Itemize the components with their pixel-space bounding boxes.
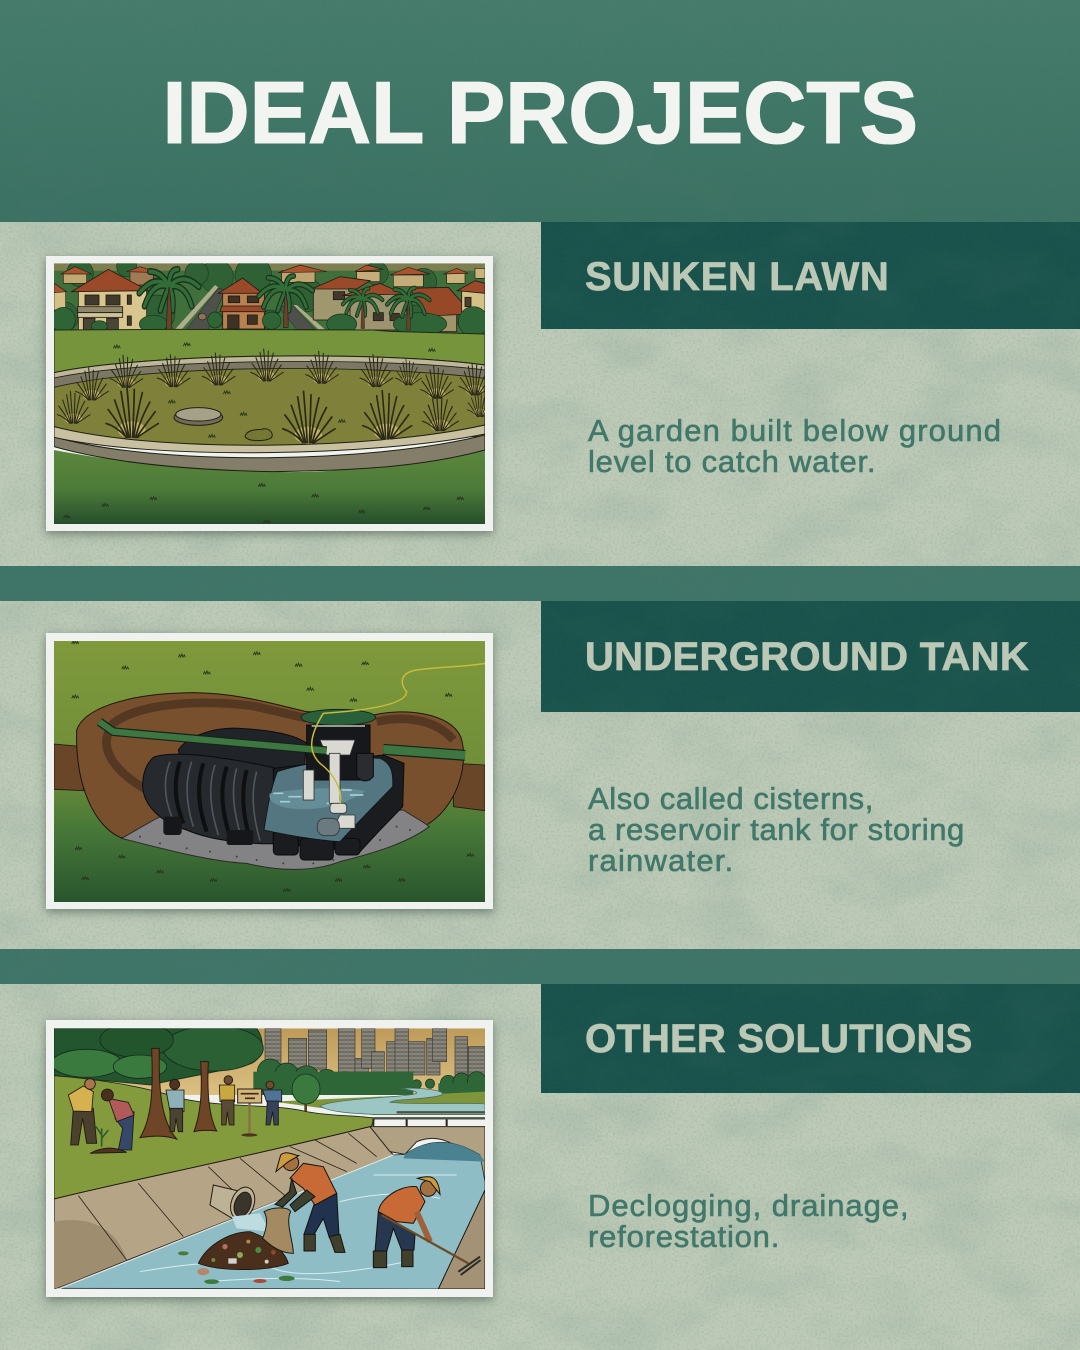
grass tufts — [72, 641, 474, 892]
photo frame 3 — [46, 1020, 493, 1297]
text: sunken lawn description — [588, 413, 1002, 479]
illustration: underground tank — [54, 641, 485, 902]
panel: underground tank heading bar — [541, 601, 1080, 712]
concrete embankment — [54, 1127, 393, 1289]
drain pipe — [210, 1184, 270, 1232]
panel: other solutions heading bar — [541, 984, 1080, 1093]
hedge row — [253, 1059, 486, 1097]
worker with rake — [373, 1177, 440, 1268]
text: other solutions description: reforestation. — [588, 1219, 780, 1254]
text: sunken lawn description: A garden built below ground — [588, 413, 1002, 448]
illustration: other solutions — [54, 1028, 485, 1289]
illustration: sunken lawn — [54, 263, 485, 524]
tank shell and feet — [273, 755, 404, 860]
text: underground tank description: Also called cisterns, — [588, 781, 874, 816]
text: underground tank description: rainwater. — [588, 843, 734, 878]
grass tufts — [63, 343, 464, 523]
white internal pipes — [303, 740, 355, 836]
heading: other solutions: OTHER SOLUTIONS — [585, 1017, 972, 1061]
text: other solutions description — [588, 1188, 910, 1254]
lawn — [54, 641, 485, 902]
basin wall and floor — [54, 356, 485, 446]
front tank — [143, 754, 283, 845]
heading: underground tank: UNDERGROUND TANK — [585, 635, 1029, 679]
sky — [54, 1028, 485, 1095]
front rim — [54, 425, 485, 472]
panel: sunken lawn heading bar — [541, 222, 1080, 329]
excavated pit — [76, 692, 464, 838]
tank cutaway water — [264, 758, 393, 842]
reforestation people — [68, 1076, 282, 1153]
yellow hose — [312, 663, 485, 803]
divider band 3 — [0, 949, 1080, 984]
shrub clump — [245, 429, 272, 441]
shrubs — [51, 307, 488, 337]
bridge — [370, 1112, 485, 1182]
far lawn — [273, 1092, 485, 1115]
lower lawn — [54, 448, 485, 524]
far river — [320, 1088, 485, 1114]
gravel bed — [122, 810, 429, 869]
park lawn — [54, 1076, 375, 1199]
back tank — [178, 728, 306, 768]
green inlet and outlet pipes — [99, 722, 465, 755]
text: underground tank description: a reservoir tank for storing — [588, 812, 965, 847]
worker with sack — [275, 1153, 345, 1252]
house left with balcony — [72, 269, 148, 330]
house centre — [218, 278, 266, 329]
palm trees — [139, 269, 430, 330]
background trees — [54, 263, 485, 334]
reforestation sign — [238, 1089, 262, 1137]
houses right — [312, 277, 485, 332]
debris pile — [178, 1232, 295, 1284]
riser chamber — [301, 709, 376, 781]
rake — [382, 1215, 481, 1275]
top title band — [0, 0, 1080, 222]
tree canopy — [52, 1023, 263, 1085]
city skyline — [265, 1028, 485, 1075]
photo frame 1 — [46, 256, 493, 531]
burlap sack — [263, 1208, 293, 1253]
canal water — [58, 1142, 485, 1289]
ornamental grasses — [57, 349, 493, 444]
large trees — [140, 1048, 217, 1139]
roads — [175, 285, 325, 329]
heading: sunken lawn: SUNKEN LAWN — [585, 255, 889, 299]
text: other solutions description: Declogging, drainage, — [588, 1188, 910, 1223]
photo frame 2 — [46, 633, 493, 909]
trench — [54, 744, 485, 811]
right bank — [438, 1190, 485, 1289]
title: IDEAL PROJECTS — [162, 63, 918, 162]
small distant houses — [54, 265, 485, 310]
divider band 2 — [0, 566, 1080, 601]
drain cover — [174, 408, 223, 425]
small tree — [292, 1074, 320, 1119]
text: underground tank description — [588, 781, 965, 878]
text: sunken lawn description: level to catch water. — [588, 444, 876, 479]
upper lawn — [54, 329, 485, 437]
